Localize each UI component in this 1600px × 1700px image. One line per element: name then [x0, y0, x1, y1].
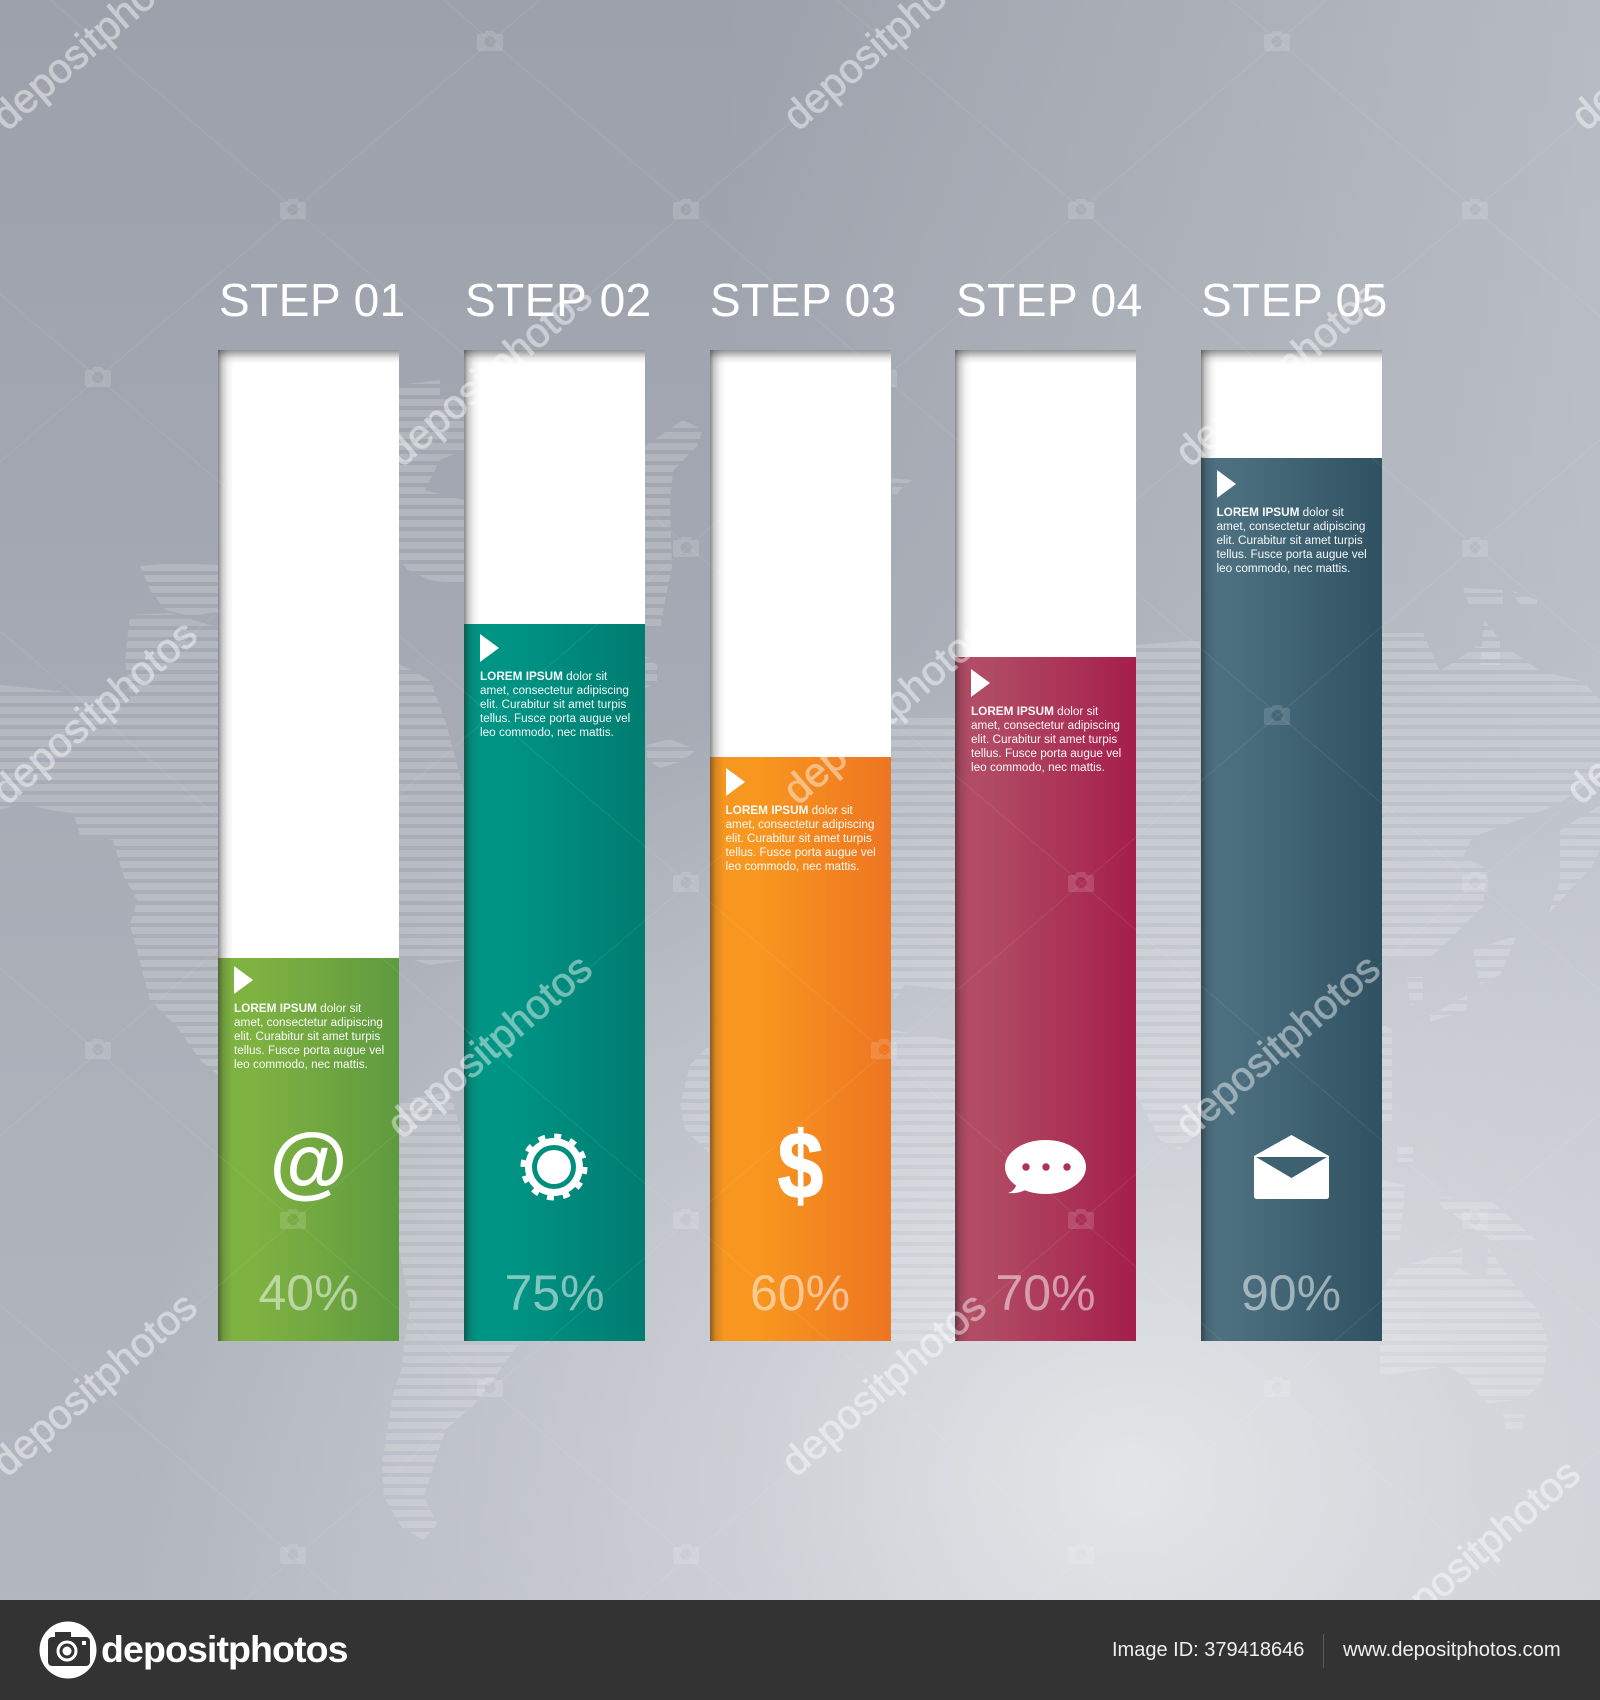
text block: leo commodo, nec mattis. [971, 761, 1105, 774]
percentage: 60% [750, 1265, 850, 1321]
icon: dollar sign: $ [777, 1112, 823, 1218]
icon: gear [520, 1134, 588, 1200]
text block: tellus. Fusce porta augue vel [480, 712, 630, 725]
text block: tellus. Fusce porta augue vel [726, 846, 876, 859]
heading: step 02: STEP 02 [465, 274, 652, 326]
icon: at sign: @ [269, 1117, 348, 1206]
watermark overlay: depositphotos [774, 611, 997, 813]
logo icon: camera badge [40, 1622, 96, 1678]
image id: Image ID: 379418646 [1112, 1639, 1304, 1661]
panel: step 04 column 70% [955, 350, 1136, 1341]
teal fill [464, 624, 645, 1341]
icon: play arrow [726, 768, 744, 796]
crimson fill [955, 657, 1136, 1341]
text block: tellus. Fusce porta augue vel [234, 1044, 384, 1057]
text block: elit. Curabitur sit amet turpis [480, 698, 626, 711]
percentage: 90% [1241, 1265, 1341, 1321]
percentage: 40% [258, 1265, 359, 1321]
text block [1216, 506, 1367, 575]
percentage: 70% [995, 1265, 1096, 1321]
text block: leo commodo, nec mattis. [726, 860, 859, 873]
text block: LOREM IPSUM dolor sit [234, 1002, 361, 1014]
text block: LOREM IPSUM dolor sit [726, 804, 853, 816]
heading: step 03: STEP 03 [710, 274, 897, 326]
text block [726, 804, 876, 873]
green fill [218, 958, 399, 1341]
heading: step 04: STEP 04 [956, 274, 1143, 326]
watermark overlay: depositphotos [378, 945, 601, 1147]
text block: LOREM IPSUM dolor sit [971, 705, 1098, 718]
percentage: 75% [504, 1265, 605, 1321]
text block: tellus. Fusce porta augue vel [971, 747, 1121, 760]
heading: step 05: STEP 05 [1201, 274, 1388, 326]
footer bar [0, 1600, 1600, 1700]
text block: amet, consectetur adipiscing [234, 1016, 383, 1029]
watermark overlay: depositphotos [378, 273, 601, 475]
text block: amet, consectetur adipiscing [1216, 520, 1365, 533]
logo wordmark: depositphotos [101, 1628, 348, 1670]
text block: elit. Curabitur sit amet turpis [1216, 534, 1363, 547]
text block [971, 705, 1121, 774]
text block: leo commodo, nec mattis. [480, 726, 614, 739]
watermark overlay: depositphotos [1166, 945, 1389, 1147]
icon: play arrow [971, 669, 990, 697]
text block: amet, consectetur adipiscing [971, 719, 1120, 732]
text block: leo commodo, nec mattis. [1216, 562, 1350, 575]
text block: amet, consectetur adipiscing [726, 818, 874, 831]
text block: elit. Curabitur sit amet turpis [971, 733, 1117, 746]
divider and site url: www.depositphotos.com [1343, 1639, 1561, 1661]
text block [234, 1002, 384, 1071]
orange fill [710, 757, 890, 1341]
watermark overlay: depositphotos [772, 1283, 995, 1485]
icon: play arrow [1216, 470, 1236, 498]
text block [480, 670, 630, 739]
text block: LOREM IPSUM dolor sit [1216, 506, 1344, 519]
text block: elit. Curabitur sit amet turpis [726, 832, 872, 845]
panel: step 05 column 90% [1200, 350, 1382, 1341]
panel: step 02 column 75% [464, 350, 645, 1341]
text block: elit. Curabitur sit amet turpis [234, 1030, 380, 1043]
icon: speech bubble [1005, 1140, 1086, 1194]
icon: play arrow [480, 634, 499, 662]
text block: tellus. Fusce porta augue vel [1216, 548, 1367, 561]
divider and site url [1323, 1634, 1564, 1668]
panel: step 03 column 60% [710, 350, 890, 1341]
watermark overlay: depositphotos [1166, 273, 1389, 475]
heading: step 01: STEP 01 [219, 274, 406, 326]
text block: LOREM IPSUM dolor sit [480, 670, 607, 682]
text block: leo commodo, nec mattis. [234, 1058, 368, 1071]
panel: step 01 column 40% [218, 350, 399, 1341]
icon: play arrow [234, 966, 253, 994]
icon: envelope [1254, 1135, 1329, 1199]
text block: amet, consectetur adipiscing [480, 684, 629, 697]
slate fill [1200, 458, 1382, 1341]
